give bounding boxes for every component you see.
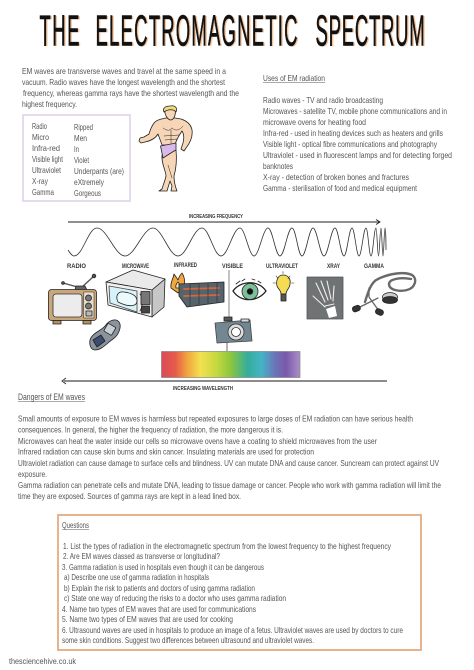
mnemonic: radiation names: Micro xyxy=(32,132,49,142)
questions list: 5. Name two types of EM waves that are used for cooking xyxy=(62,614,233,624)
title: ELECTROMAGNETIC xyxy=(97,7,299,56)
arrow: increasing wavelength xyxy=(62,378,387,392)
title: SPECTRUM xyxy=(317,7,426,56)
mnemonic: radiation names: X-ray xyxy=(32,176,49,186)
dangers text: exposure. xyxy=(18,469,47,479)
questions list: 3. Gamma radiation is used in hospitals even though it can be dangerous xyxy=(62,562,264,572)
uses heading: Uses of EM radiation xyxy=(263,73,325,83)
spectrum band labels: MICROWAVE xyxy=(122,263,149,270)
questions list: c) State one way of reducing the risks to a doctor who uses gamma radiation xyxy=(64,593,286,603)
title: THE xyxy=(40,6,79,56)
questions list xyxy=(62,541,403,645)
mnemonic: phrase words: Violet xyxy=(74,155,89,165)
questions list: b) Explain the risk to patients and doctors of using gamma radiation xyxy=(64,583,255,593)
title: THE xyxy=(41,7,81,56)
uses list xyxy=(263,95,452,193)
dangers text: time they are exposed. Sources of gamma rays are kept in a lead lined box. xyxy=(18,491,241,501)
spectrum band labels: INFRARED xyxy=(174,262,197,269)
mnemonic: phrase words: In xyxy=(74,144,79,154)
dangers text: Microwaves can heat the water inside our cells so microwave ovens have a coating to shield microwaves from the user xyxy=(18,436,377,446)
questions list: some skin conditions. Suggest two differences between ultrasound and ultraviolet waves. xyxy=(62,635,314,645)
icon: mobile phone xyxy=(90,320,120,350)
uses list: microwave ovens for heating food xyxy=(263,117,366,127)
title: SPECTRUM xyxy=(316,6,425,56)
icon: x-ray of hand xyxy=(307,277,343,319)
dangers text: consequences. In general, the higher the frequency of radiation, the more dangerous it is. xyxy=(18,424,283,434)
uses list: X-ray - detection of broken bones and fractures xyxy=(263,172,409,182)
questions heading: Questions xyxy=(62,520,89,530)
spectrum band labels xyxy=(67,262,384,270)
icon: eye xyxy=(233,279,266,300)
chart: wave of increasing frequency xyxy=(68,228,386,256)
icon: heater with flames xyxy=(171,273,224,307)
mnemonic: radiation names: Infra-red xyxy=(32,143,60,153)
arrow: increasing frequency: INCREASING FREQUENCY xyxy=(189,214,244,220)
icon: stethoscope xyxy=(352,273,415,316)
dangers section xyxy=(18,392,441,501)
questions list: 1. List the types of radiation in the electromagnetic spectrum from the lowest frequency to the highest frequency xyxy=(63,541,392,551)
arrow: increasing frequency xyxy=(68,214,380,224)
uses of EM radiation xyxy=(263,73,452,193)
footer: website: thesciencehive.co.uk xyxy=(9,656,77,666)
mnemonic: phrase words: Underpants (are) xyxy=(74,166,124,176)
questions list: 2. Are EM waves classed as transverse or longitudinal? xyxy=(63,551,220,561)
mnemonic: phrase words: Ripped xyxy=(74,122,93,132)
questions list: 4. Name two types of EM waves that are used for communications xyxy=(62,604,256,614)
uses list: Radio waves - TV and radio broadcasting xyxy=(263,95,383,105)
mnemonic: radiation names: Gamma xyxy=(32,187,54,197)
mnemonic: phrase words xyxy=(74,122,124,198)
mnemonic: radiation names: Visible light xyxy=(32,154,63,164)
intro text block: frequency, whereas gamma rays have the shortest wavelength and the xyxy=(23,88,239,98)
spectrum band labels: GAMMA xyxy=(364,263,384,270)
mnemonic: phrase words: Men xyxy=(74,133,87,143)
mnemonic: phrase words: eXtremely xyxy=(74,177,105,187)
uses list: Gamma - sterilisation of food and medical equipment xyxy=(263,183,418,193)
title xyxy=(40,6,426,56)
spectrum colour bar xyxy=(162,352,300,378)
spectrum band labels: RADIO xyxy=(67,263,86,270)
panel: mnemonic box xyxy=(23,115,130,201)
spectrum band labels: ULTRAVIOLET xyxy=(266,263,298,270)
arrow: visible to camera xyxy=(228,270,230,318)
mnemonic: radiation names xyxy=(32,121,63,197)
dangers heading: Dangers of EM waves xyxy=(18,392,85,402)
arrow: increasing wavelength: INCREASING WAVELENGTH xyxy=(173,386,233,392)
arrow: camera to spectrum xyxy=(226,342,228,351)
intro text block: EM waves are transverse waves and travel at the same speed in a xyxy=(22,66,226,76)
title: ELECTROMAGNETIC xyxy=(96,6,298,56)
uses list: banknotes xyxy=(263,161,293,171)
dangers text: Infrared radiation can cause skin burns and skin cancer. Insulating materials are used for protection xyxy=(18,446,314,456)
intro text block: highest frequency. xyxy=(22,99,77,109)
spectrum band labels: XRAY xyxy=(327,263,341,270)
icon: television xyxy=(48,274,96,324)
icon: camera xyxy=(215,317,252,343)
questions list: a) Describe one use of gamma radiation in hospitals xyxy=(64,572,209,582)
mnemonic: radiation names: Ultraviolet xyxy=(32,165,62,175)
icon: light bulb xyxy=(273,272,294,301)
spectrum band labels: VISIBLE xyxy=(222,263,243,270)
icon: microwave oven xyxy=(106,270,165,317)
intro text block xyxy=(22,66,239,109)
dangers text xyxy=(18,414,441,501)
mnemonic: radiation names: Radio xyxy=(32,121,47,131)
panel: questions xyxy=(58,515,421,650)
mnemonic: phrase words: Gorgeous xyxy=(74,188,101,198)
intro text block: vacuum. Radio waves have the longest wavelength and the shortest xyxy=(22,77,226,87)
icon: bodybuilder xyxy=(139,106,192,191)
